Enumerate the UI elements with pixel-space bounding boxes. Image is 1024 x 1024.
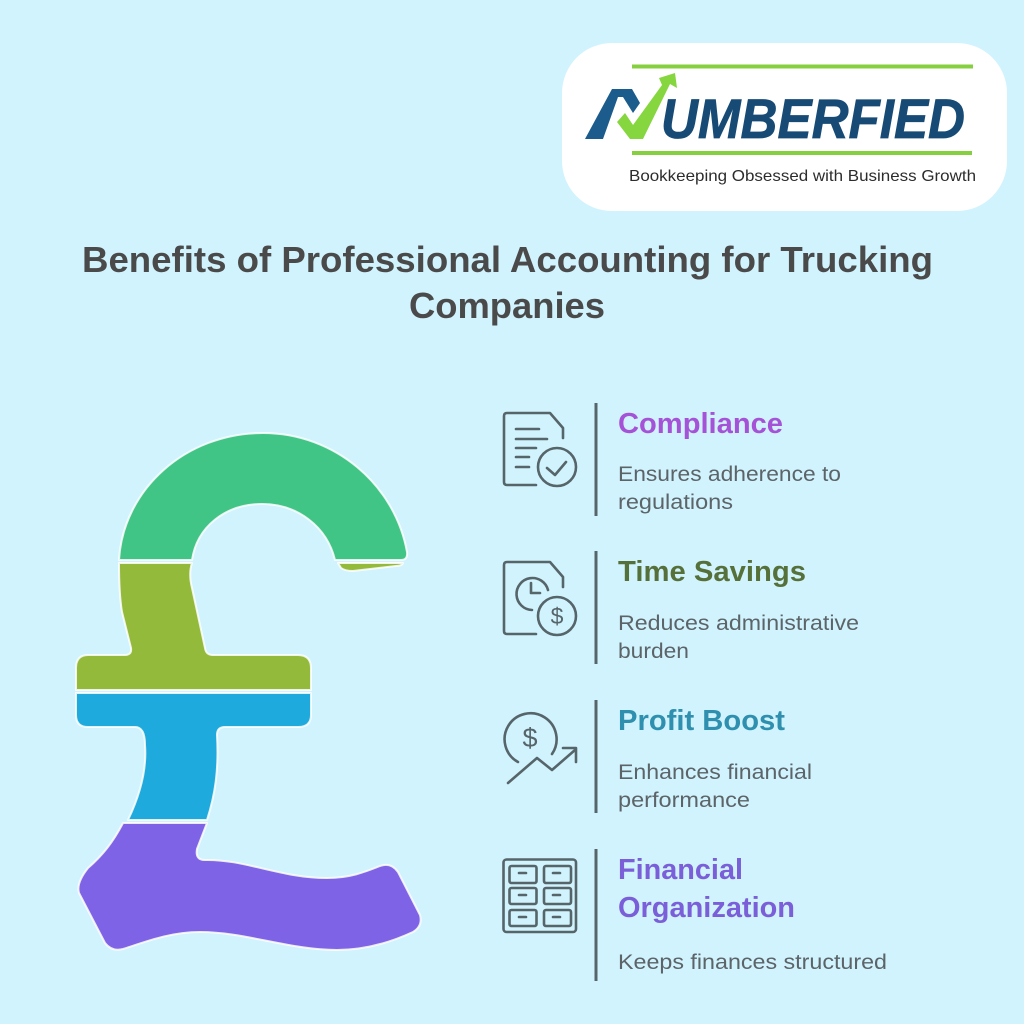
item: time savings — [504, 551, 859, 664]
heading: profit boost: Profit Boost — [618, 705, 785, 737]
title: Benefits of Professional Accounting for Trucking — [82, 239, 933, 280]
text: profit boost description: performance — [618, 788, 750, 812]
logo card: Bookkeeping Obsessed with Business Growth — [629, 168, 976, 185]
heading: financial organization: Organization — [618, 892, 795, 924]
icon: dollar coin with rising arrow — [505, 713, 576, 783]
title — [82, 239, 933, 326]
pound sign chart — [76, 433, 421, 950]
text: time savings description: burden — [618, 639, 689, 663]
heading: financial organization: Financial — [618, 854, 743, 886]
text: compliance description: Ensures adherence to — [618, 462, 841, 486]
item: profit boost — [505, 700, 812, 813]
logo card — [562, 43, 1007, 211]
text: financial organization description: Keeps finances structured — [618, 950, 887, 974]
icon: grid of drawers — [504, 860, 576, 932]
item: compliance — [504, 403, 841, 516]
heading: compliance: Compliance — [618, 408, 783, 440]
segment: blue stem and lower bar — [76, 693, 311, 820]
title: Companies — [409, 285, 605, 326]
icon: dollar coin with rising arrow: $ — [522, 723, 538, 753]
segment: olive stem and upper bar — [76, 563, 403, 690]
heading: financial organization — [618, 854, 795, 924]
icon: document with clock and dollar: $ — [551, 603, 564, 629]
icon: document with check — [504, 413, 576, 486]
text: compliance description — [618, 462, 841, 514]
segment: purple base — [78, 823, 421, 950]
segment: green arc — [119, 433, 407, 560]
icon: document with clock and dollar — [504, 562, 576, 635]
logo card: UMBERFIED — [661, 87, 965, 150]
text: profit boost description: Enhances financial — [618, 760, 812, 784]
text: time savings description — [618, 611, 859, 663]
text: time savings description: Reduces administrative — [618, 611, 859, 635]
item: financial organization — [504, 849, 887, 981]
text: compliance description: regulations — [618, 490, 733, 514]
text: profit boost description — [618, 760, 812, 812]
heading: time savings: Time Savings — [618, 556, 806, 588]
